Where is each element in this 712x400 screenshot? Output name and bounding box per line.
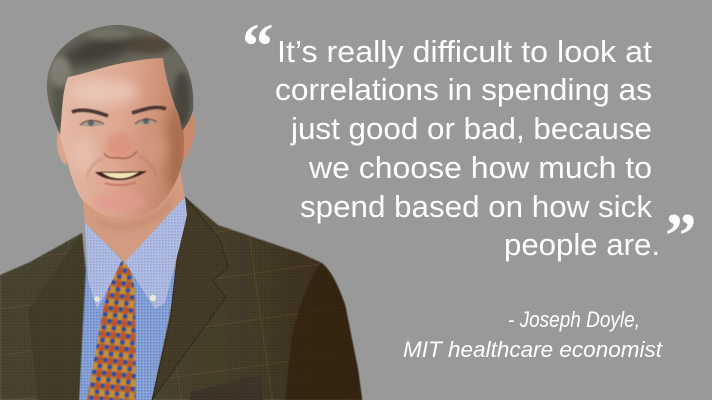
nose: [106, 133, 131, 157]
smile: [95, 171, 147, 185]
quote text: we choose how much to: [308, 150, 652, 185]
shirt body: [78, 262, 178, 400]
portrait: Joseph Doyle: [0, 20, 362, 400]
jacket: [0, 197, 362, 400]
attribution: MIT healthcare economist: [403, 337, 663, 362]
pocket: [190, 375, 263, 400]
left cheek: [74, 138, 96, 172]
left lapel: [28, 233, 84, 400]
attribution: - Joseph Doyle,: [508, 307, 640, 332]
quote text: just good or bad, because: [290, 111, 652, 146]
attribution: [403, 307, 663, 362]
quote text: people are.: [504, 227, 660, 262]
right lapel: [152, 197, 228, 400]
neck shadow: [92, 192, 176, 230]
closing quotation mark: ”: [665, 201, 696, 271]
hair: [46, 25, 194, 135]
quote text: spend based on how sick: [300, 189, 652, 224]
neck: [82, 170, 185, 262]
face: [60, 58, 184, 218]
quote text: [275, 34, 660, 262]
right cheek: [155, 141, 169, 159]
eyebrows: [72, 107, 166, 116]
shirt collar: [85, 197, 187, 309]
chin: [96, 195, 145, 209]
right side shadow: [167, 105, 185, 195]
forehead highlight: [71, 79, 139, 105]
right sleeve shading: [285, 263, 362, 400]
quote text: It’s really difficult to look at: [277, 34, 652, 69]
smile lines: [87, 156, 156, 178]
nose: [104, 151, 137, 158]
opening quotation mark: “: [242, 11, 274, 81]
ears: [57, 113, 195, 165]
quote text: correlations in spending as: [275, 72, 652, 107]
eyes: [80, 118, 157, 126]
necktie: [87, 261, 136, 400]
